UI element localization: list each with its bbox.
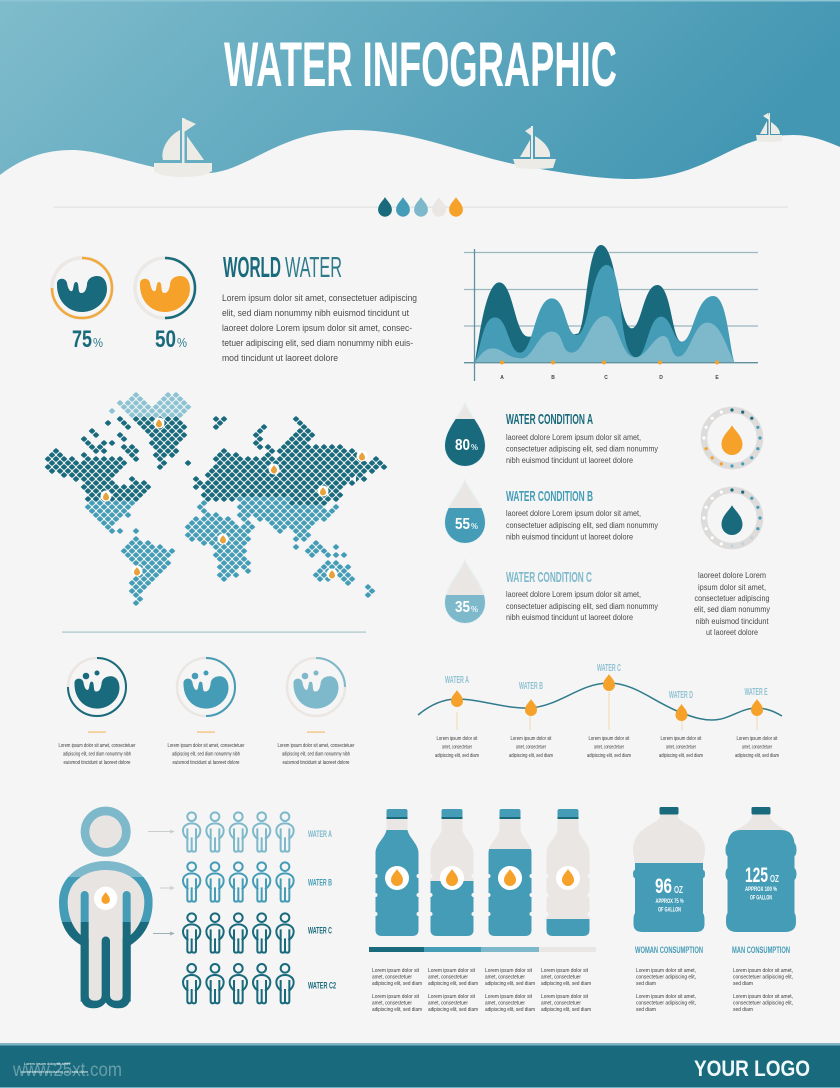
- jug: man consumption: OZ: [770, 874, 779, 885]
- people row: water A: [183, 812, 332, 852]
- timeline wave chart: amet, consectetuer: [442, 744, 472, 750]
- area chart: A: [500, 375, 504, 381]
- text blocks under bottles: adipiscing elit, sed diam: [428, 1007, 478, 1013]
- area chart: E: [715, 375, 719, 381]
- area chart: C: [604, 375, 608, 381]
- footer bar: Lorem ipsum dolor sit amet: [24, 1061, 71, 1066]
- text block: world water: tetuer adipiscing elit, sed diam nonummy nibh euis-: [222, 338, 413, 348]
- people row: water C: WATER C: [308, 926, 332, 936]
- water condition A drop: 80: [455, 437, 470, 454]
- people row: water B: WATER B: [308, 878, 332, 888]
- text block: woman consumption: Lorem ipsum dolor sit amet,: [636, 968, 696, 974]
- timeline wave chart: WATER A: [445, 675, 469, 686]
- text blocks under bottles: amet, consectetuer: [372, 974, 412, 980]
- text block: water condition B: WATER CONDITION B: [506, 488, 593, 505]
- text blocks under bottles: adipiscing elit, sed diam: [428, 981, 478, 987]
- large human figure: [59, 806, 153, 1008]
- level circle: light: adipiscing elit, sed diam nonummy nibh: [282, 752, 350, 758]
- people row: water C: [183, 913, 332, 953]
- text block: water condition B: laoreet dolore Lorem ipsum dolor sit amet,: [506, 508, 641, 518]
- people row: water B: [183, 862, 332, 902]
- area chart: [464, 245, 758, 381]
- text block: gauge note: [694, 570, 771, 637]
- gauge: 50%: %: [177, 335, 187, 350]
- text blocks under bottles: amet, consectetuer: [428, 1000, 468, 1006]
- level circle: light: [278, 658, 355, 766]
- arrows to people rows: [148, 830, 174, 935]
- dark diamonds: northern land, even rows: [44, 416, 388, 502]
- water condition B drop: 55: [455, 516, 470, 533]
- timeline wave chart: [418, 663, 782, 759]
- text block: water condition C: [506, 569, 659, 622]
- text block: water condition C: nibh euismod tincidunt ut laoreet dolore: [506, 612, 633, 622]
- jug: man consumption: [726, 807, 796, 932]
- text block: man consumption: consectetuer adipiscing elit,: [733, 974, 793, 980]
- text blocks under bottles: Lorem ipsum dolor sit: [541, 968, 589, 974]
- section divider with colour drops: [54, 197, 788, 217]
- text block: water condition C: consectetuer adipiscing elit, sed diam nonummy: [506, 601, 659, 611]
- jug: woman consumption: APPROX 75 %: [656, 898, 684, 905]
- text block: gauge note: consectetuer adipiscing: [694, 593, 770, 603]
- water condition A drop: %: [471, 443, 478, 452]
- timeline wave chart: adipiscing elit, sed diam: [659, 753, 703, 759]
- dark diamonds: northern land, odd rows: [48, 420, 384, 506]
- text blocks under bottles: amet, consectetuer: [372, 1000, 412, 1006]
- bottle 2: [428, 809, 476, 936]
- text blocks under bottles: adipiscing elit, sed diam: [485, 1007, 535, 1013]
- text blocks under bottles: adipiscing elit, sed diam: [541, 1007, 591, 1013]
- jug: man consumption: APPROX 100 %: [745, 886, 777, 893]
- level circle: medium: [168, 658, 245, 766]
- timeline wave chart: amet, consectetuer: [666, 744, 696, 750]
- text block: water condition A: nibh euismod tincidunt ut laoreet dolore: [506, 455, 633, 465]
- colour bar under bottles: [369, 947, 596, 952]
- people row: water C2: [183, 964, 336, 1003]
- text blocks under bottles: Lorem ipsum dolor sit: [372, 968, 420, 974]
- text block: water condition B: nibh euismod tincidunt ut laoreet dolore: [506, 532, 633, 542]
- light diamonds: arctic, odd rows: [120, 396, 192, 418]
- icon: left sailboat: [154, 118, 212, 177]
- timeline wave chart: WATER C: [597, 663, 621, 674]
- text block: world water: mod tincidunt ut laoreet dolore: [222, 353, 338, 363]
- heading: world water: WATER: [285, 252, 342, 284]
- level circle: medium: euismod tincidunt ut laoreet dolore: [172, 760, 240, 766]
- area chart: B: [551, 375, 555, 381]
- gauge: 75%: [52, 258, 112, 353]
- level circle: dark: euismod tincidunt ut laoreet dolore: [64, 760, 131, 766]
- text blocks under bottles: Lorem ipsum dolor sit: [485, 994, 533, 1000]
- timeline wave chart: WATER B: [519, 681, 543, 692]
- text blocks under bottles: Lorem ipsum dolor sit: [485, 968, 533, 974]
- jug: woman consumption: OZ: [674, 885, 683, 896]
- level circle: dark: Lorem ipsum dolor sit amet, consectetuer: [58, 743, 136, 749]
- timeline wave chart: Lorem ipsum dolor sit: [660, 736, 702, 742]
- text blocks under bottles: amet, consectetuer: [485, 974, 525, 980]
- timeline wave chart: Lorem ipsum dolor sit: [588, 736, 630, 742]
- heading: world water: WORLD: [223, 252, 281, 284]
- text blocks under bottles: adipiscing elit, sed diam: [541, 981, 591, 987]
- text block: gauge note: ut laoreet dolore: [706, 627, 758, 637]
- level circle: light: euismod tincidunt ut laoreet dolore: [282, 760, 350, 766]
- medium diamonds: southern land, even rows: [84, 496, 372, 606]
- water condition B drop: [445, 480, 485, 543]
- footer bar: www.25xt.com: [12, 1060, 122, 1081]
- level circle: medium: adipiscing elit, sed diam nonummy nibh: [172, 752, 240, 758]
- icon: middle sailboat: [513, 126, 556, 169]
- timeline wave chart: Lorem ipsum dolor sit: [436, 736, 478, 742]
- area chart: D: [659, 375, 663, 381]
- level circle: medium: Lorem ipsum dolor sit amet, consectetuer: [168, 743, 245, 749]
- text block: man consumption: consectetuer adipiscing elit,: [733, 1000, 793, 1006]
- text block: woman consumption: consectetuer adipiscing elit,: [636, 974, 696, 980]
- timeline wave chart: WATER E: [744, 687, 768, 698]
- text blocks under bottles: adipiscing elit, sed diam: [372, 1007, 422, 1013]
- text block: man consumption: Lorem ipsum dolor sit amet,: [733, 994, 793, 1000]
- text block: woman consumption: [635, 945, 703, 1013]
- water condition C drop: 35: [455, 599, 470, 616]
- text block: water condition A: laoreet dolore Lorem ipsum dolor sit amet,: [506, 432, 641, 442]
- dial gauge: orange drop: [702, 408, 762, 468]
- text block: world water: [222, 293, 417, 363]
- text block: gauge note: laoreet dolore Lorem: [698, 570, 766, 580]
- footer bar: [0, 1043, 840, 1088]
- text block: gauge note: ipsum dolor sit amet,: [698, 582, 766, 592]
- footer bar: consectetuer adipiscing elit, sed diam: [21, 1069, 89, 1074]
- timeline wave chart: WATER D: [669, 690, 693, 701]
- footer bar: YOUR LOGO: [694, 1056, 810, 1081]
- text block: world water: elit, sed diam nonummy nibh euismod tincidunt ut: [222, 308, 409, 318]
- icon: right sailboat: [756, 113, 782, 142]
- gauge: 75%: 75: [72, 326, 92, 353]
- text blocks under bottles: amet, consectetuer: [541, 1000, 581, 1006]
- people row: water A: WATER A: [308, 829, 332, 839]
- water condition C drop: [445, 560, 485, 623]
- header wave banner: [0, 0, 840, 205]
- text blocks under bottles: Lorem ipsum dolor sit: [428, 994, 476, 1000]
- timeline wave chart: adipiscing elit, sed diam: [509, 753, 553, 759]
- level circle: dark: adipiscing elit, sed diam nonummy nibh: [63, 752, 131, 758]
- text block: world water: Lorem ipsum dolor sit amet, consectetuer adipiscing: [222, 293, 417, 303]
- text block: man consumption: [732, 945, 793, 1013]
- text block: water condition A: consectetuer adipiscing elit, sed diam nonummy: [506, 444, 659, 454]
- bottle 4: [544, 809, 592, 936]
- timeline wave chart: Lorem ipsum dolor sit: [510, 736, 552, 742]
- level circle: dark: [58, 658, 136, 766]
- water condition A drop: [445, 403, 485, 466]
- text block: gauge note: elit, sed diam nonummy: [694, 604, 771, 614]
- text block: man consumption: sed diam: [733, 981, 753, 987]
- bottle 3: [486, 809, 534, 936]
- text blocks under bottles: amet, consectetuer: [541, 974, 581, 980]
- timeline wave chart: adipiscing elit, sed diam: [735, 753, 779, 759]
- text block: water condition B: consectetuer adipiscing elit, sed diam nonummy: [506, 520, 659, 530]
- text blocks under bottles: amet, consectetuer: [485, 1000, 525, 1006]
- jug: woman consumption: OF GALLON: [658, 906, 681, 914]
- jug: man consumption: OF GALLON: [750, 894, 772, 902]
- gauge: 50%: 50: [155, 326, 176, 353]
- text block: water condition C: WATER CONDITION C: [506, 569, 592, 586]
- level circle: light: Lorem ipsum dolor sit amet, consectetuer: [278, 743, 355, 749]
- text block: man consumption: Lorem ipsum dolor sit amet,: [733, 968, 793, 974]
- text blocks under bottles: adipiscing elit, sed diam: [372, 981, 422, 987]
- text blocks under bottles: Lorem ipsum dolor sit: [541, 994, 589, 1000]
- bottle 1: [374, 809, 420, 936]
- water condition C drop: %: [471, 605, 478, 614]
- jug: man consumption: 125: [745, 864, 768, 887]
- text block: water condition A: [506, 411, 659, 465]
- jug: woman consumption: 96: [655, 875, 672, 898]
- people row: water C2: WATER C2: [308, 980, 336, 990]
- text blocks under bottles: adipiscing elit, sed diam: [485, 981, 535, 987]
- text blocks under bottles: amet, consectetuer: [428, 974, 468, 980]
- timeline wave chart: amet, consectetuer: [742, 744, 772, 750]
- world map: [44, 392, 388, 606]
- text block: water condition A: WATER CONDITION A: [506, 411, 593, 428]
- text block: woman consumption: sed diam: [636, 981, 656, 987]
- timeline wave chart: Lorem ipsum dolor sit: [736, 736, 778, 742]
- medium diamonds: southern land, odd rows: [88, 500, 376, 602]
- text blocks under bottles: Lorem ipsum dolor sit: [372, 994, 420, 1000]
- text blocks under bottles: [372, 968, 591, 1013]
- dial gauge: dark drop: [702, 488, 762, 548]
- gauge: 50%: [135, 258, 195, 353]
- timeline wave chart: adipiscing elit, sed diam: [587, 753, 631, 759]
- text block: gauge note: nibh euismod tincidunt: [696, 616, 769, 626]
- text block: woman consumption: Lorem ipsum dolor sit amet,: [636, 994, 696, 1000]
- map pins: [100, 418, 368, 580]
- water condition B drop: %: [471, 522, 478, 531]
- light diamonds: arctic, even rows: [108, 392, 188, 414]
- text block: world water: laoreet dolore Lorem ipsum dolor sit amet, consec-: [222, 323, 412, 333]
- jug: woman consumption: [633, 807, 705, 932]
- text block: woman consumption: WOMAN CONSUMPTION: [635, 945, 703, 956]
- text block: water condition B: [506, 488, 659, 542]
- timeline wave chart: adipiscing elit, sed diam: [435, 753, 479, 759]
- timeline wave chart: amet, consectetuer: [516, 744, 546, 750]
- text block: woman consumption: consectetuer adipiscing elit,: [636, 1000, 696, 1006]
- timeline wave chart: amet, consectetuer: [594, 744, 624, 750]
- gauge: 75%: %: [93, 335, 103, 350]
- text block: man consumption: sed diam: [733, 1007, 753, 1013]
- text block: woman consumption: sed diam: [636, 1007, 656, 1013]
- text block: water condition C: laoreet dolore Lorem ipsum dolor sit amet,: [506, 589, 641, 599]
- text blocks under bottles: Lorem ipsum dolor sit: [428, 968, 476, 974]
- text block: man consumption: MAN CONSUMPTION: [732, 945, 790, 956]
